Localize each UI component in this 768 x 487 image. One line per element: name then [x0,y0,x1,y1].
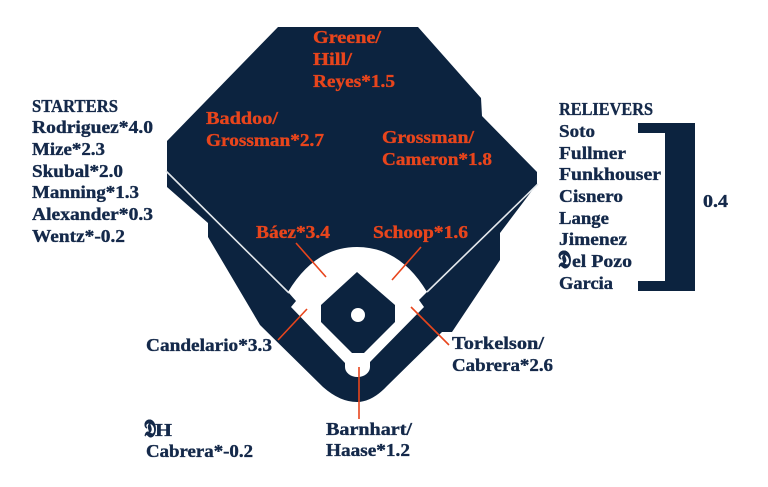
right foul line [427,184,538,292]
relievers bracket [638,123,695,291]
label: designated hitter: Cabrera*-0.2 [146,441,253,461]
label: first base: Cabrera*2.6 [452,355,553,375]
relievers list: Cisnero [559,186,623,206]
label: first base [452,333,553,375]
starters list: Wentz*-0.2 [32,226,125,246]
label: catcher: Haase*1.2 [326,440,410,460]
label: left field: Baddoo/ [206,108,279,128]
pitcher's mound [351,308,365,322]
relievers list: Lange [559,208,609,228]
label: designated hitter: H [155,420,172,440]
relievers value: 0.4 [703,191,728,211]
label: designated hitter: 𝕯 [144,416,156,443]
relievers list: 𝕯 [558,247,571,274]
starters list: Skubal*2.0 [32,161,123,181]
baseball field diagram [166,27,538,402]
label: center field: Hill/ [313,49,353,69]
label: right field [382,127,492,169]
label: designated hitter [144,416,253,461]
relievers list: Jimenez [559,229,627,249]
starters list: Alexander*0.3 [32,204,153,224]
position pointer lines [278,243,449,419]
relievers list: Soto [559,121,595,141]
label: catcher [326,419,413,460]
label: right field: Grossman/ [382,127,475,147]
label: right field: Cameron*1.8 [382,149,492,169]
starters list [32,96,153,246]
label: third base: Candelario*3.3 [146,335,272,355]
label: shortstop: Báez*3.4 [256,222,330,242]
label: center field: Reyes*1.5 [313,71,395,91]
label: second base: Schoop*1.6 [373,222,468,242]
starters list: STARTERS [32,96,118,116]
relievers list [558,99,661,293]
infield dirt [288,247,427,377]
starters list: Manning*1.3 [32,182,139,202]
label: left field [206,108,324,150]
label: catcher: Barnhart/ [326,419,413,439]
label: center field [313,27,395,91]
label: left field: Grossman*2.7 [206,130,324,150]
relievers list: Funkhouser [559,164,661,184]
relievers list: el Pozo [572,251,632,271]
relievers list: Fullmer [559,143,626,163]
infield grass diamond [321,272,395,353]
label: center field: Greene/ [313,27,382,47]
starters list: Rodriguez*4.0 [32,117,153,137]
relievers list: RELIEVERS [559,99,653,119]
outfield and foul territory [167,27,537,402]
starters list: Mize*2.3 [32,139,105,159]
label: first base: Torkelson/ [452,333,545,353]
left foul line [166,171,289,293]
relievers list: Garcia [559,273,613,293]
